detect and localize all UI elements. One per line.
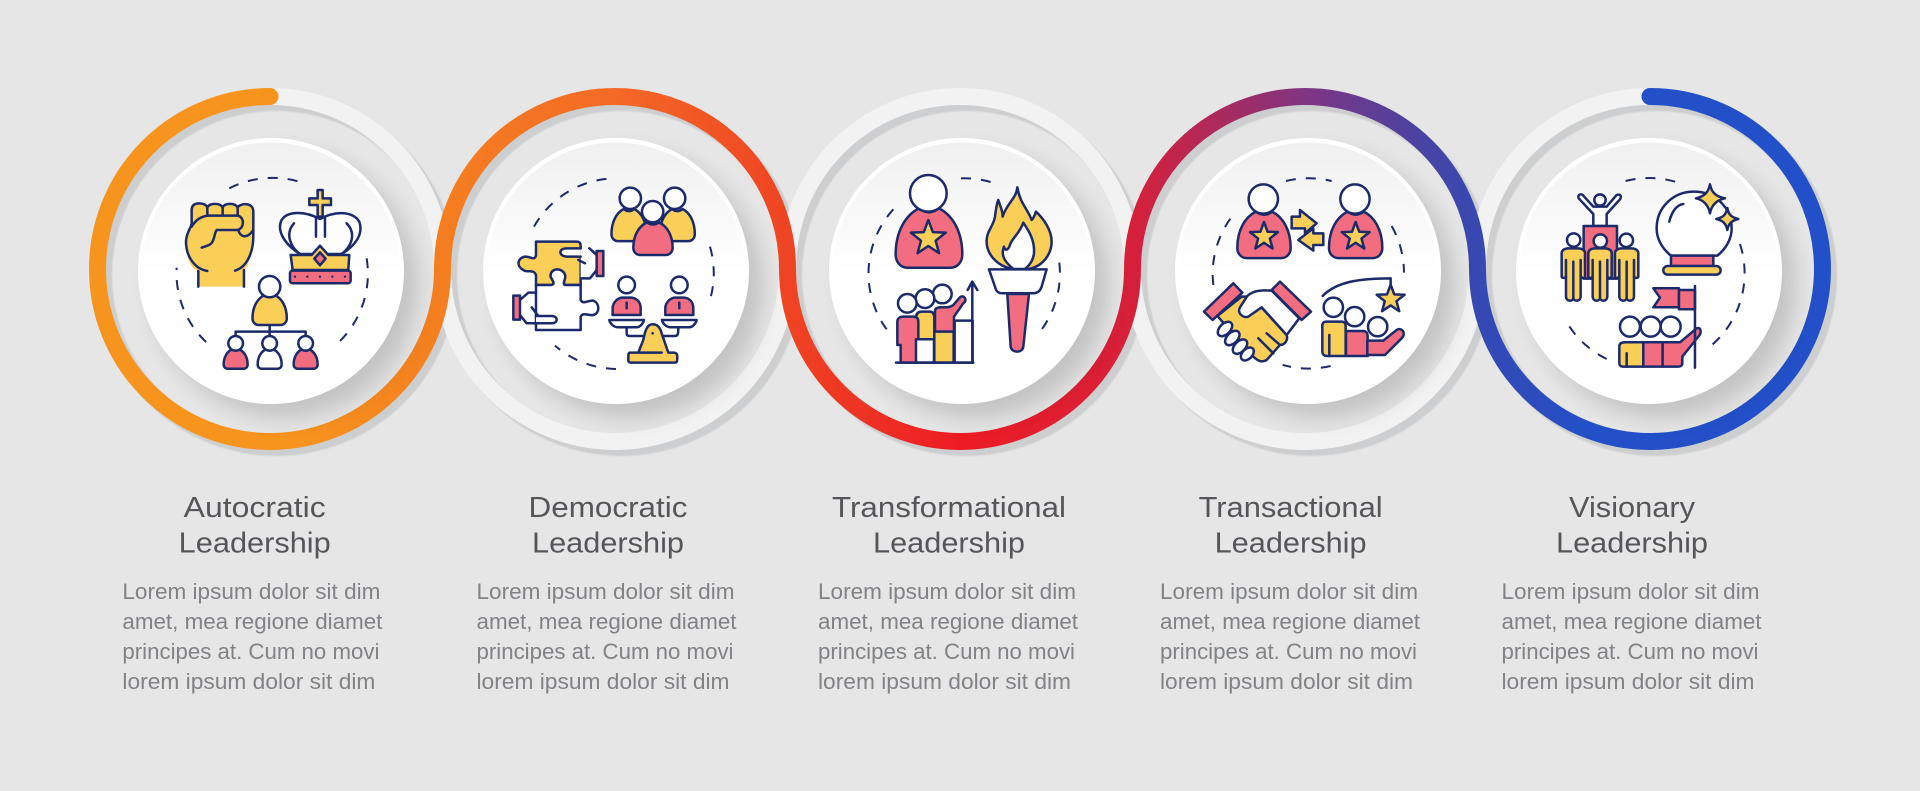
body text: Lorem ipsum dolor sit dim — [1160, 579, 1418, 604]
icon: fist, crown and hierarchy — [176, 178, 368, 369]
ribbon shadow — [104, 102, 1829, 448]
body text: principes at. Cum no movi — [122, 639, 379, 664]
disc — [1516, 138, 1796, 418]
body text: amet, mea regione diamet — [1160, 609, 1420, 634]
panel: Democratic Leadership — [476, 138, 763, 694]
body text: lorem ipsum dolor sit dim — [476, 669, 730, 694]
icon: leader, torch and growth — [868, 175, 1060, 363]
light ribbon track — [270, 96, 1650, 442]
body text: lorem ipsum dolor sit dim — [818, 669, 1071, 694]
heading: Leadership — [179, 528, 331, 560]
body text — [1502, 579, 1762, 694]
icon: crowd, crystal ball and flag — [1562, 178, 1745, 368]
disc — [1175, 138, 1455, 418]
heading — [1556, 492, 1708, 560]
heading: Democratic — [528, 492, 688, 524]
body text: lorem ipsum dolor sit dim — [1160, 669, 1413, 694]
heading: Leadership — [1215, 528, 1367, 560]
body text — [818, 579, 1078, 694]
body text: amet, mea regione diamet — [122, 609, 382, 634]
panel: Visionary Leadership — [1502, 138, 1796, 694]
heading: Leadership — [1556, 528, 1708, 560]
body text: principes at. Cum no movi — [1502, 639, 1758, 664]
panel: Transactional Leadership — [1160, 138, 1455, 694]
body text: principes at. Cum no movi — [476, 639, 734, 664]
heading: Transactional — [1199, 492, 1383, 524]
body text: lorem ipsum dolor sit dim — [1502, 669, 1754, 694]
body text: principes at. Cum no movi — [1160, 639, 1417, 664]
heading: Leadership — [532, 528, 684, 560]
heading — [179, 492, 331, 560]
coloured gradient ribbon — [98, 96, 1823, 442]
body text — [1160, 579, 1420, 694]
body text: amet, mea regione diamet — [818, 609, 1078, 634]
body text: lorem ipsum dolor sit dim — [122, 669, 375, 694]
body text: principes at. Cum no movi — [818, 639, 1075, 664]
panel: Autocratic Leadership — [122, 138, 418, 694]
icon: team, puzzle and scales — [513, 178, 714, 369]
icon: exchange, handshake and rewards — [1204, 178, 1405, 369]
heading — [1199, 492, 1383, 560]
heading: Transformational — [832, 492, 1066, 524]
body text: Lorem ipsum dolor sit dim — [476, 579, 734, 604]
body text — [476, 579, 736, 694]
body text: amet, mea regione diamet — [476, 609, 736, 634]
panel: Transformational Leadership — [818, 138, 1109, 694]
heading: Leadership — [873, 528, 1025, 560]
heading: Visionary — [1569, 492, 1696, 524]
body text: Lorem ipsum dolor sit dim — [122, 579, 380, 604]
body text — [122, 579, 382, 694]
body text: Lorem ipsum dolor sit dim — [1502, 579, 1760, 604]
disc — [138, 138, 418, 418]
body text: amet, mea regione diamet — [1502, 609, 1762, 634]
body text: Lorem ipsum dolor sit dim — [818, 579, 1076, 604]
disc — [483, 138, 763, 418]
heading — [528, 492, 688, 560]
disc — [829, 138, 1109, 418]
heading: Autocratic — [184, 492, 326, 524]
heading — [832, 492, 1066, 560]
